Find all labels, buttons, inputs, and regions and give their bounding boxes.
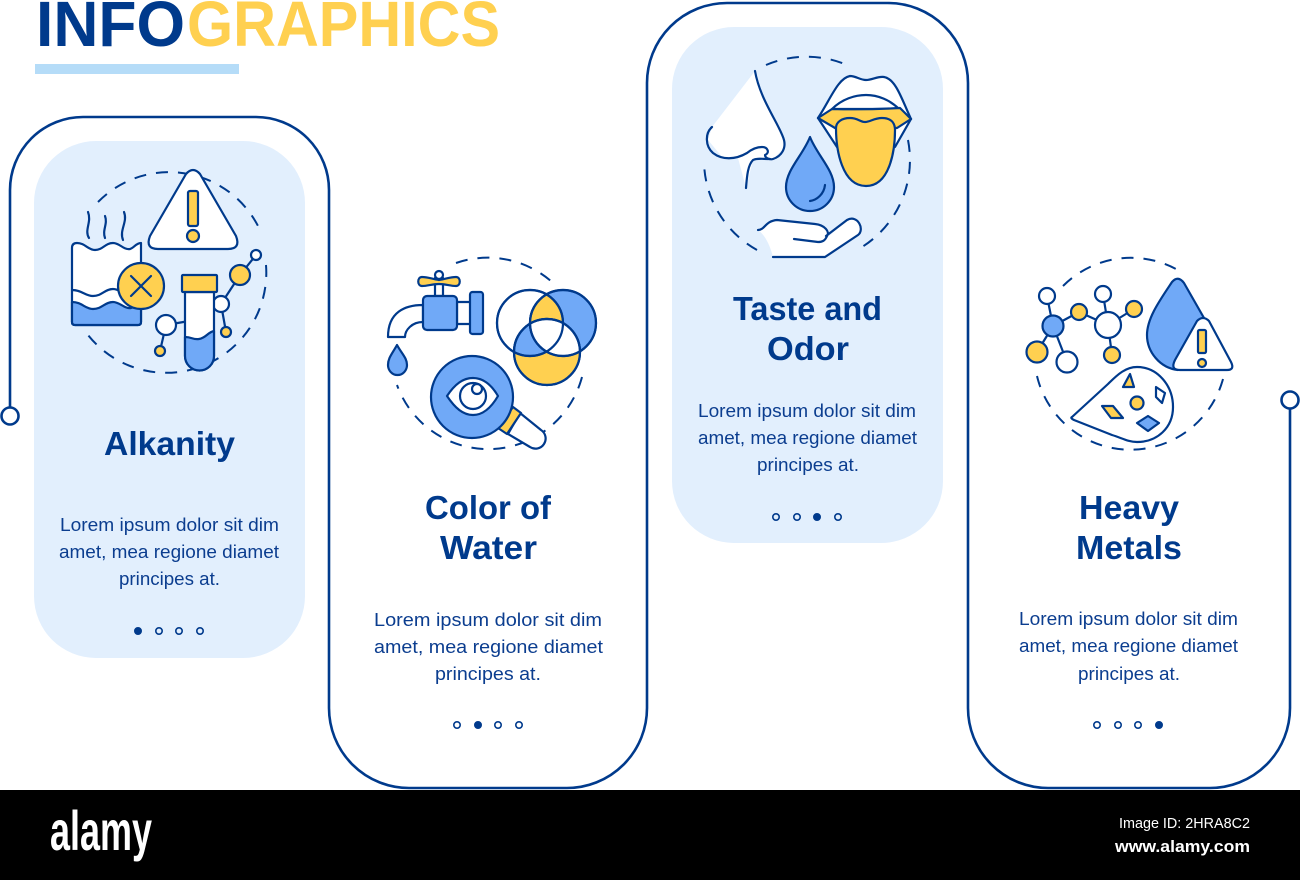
text: Heavy Metals description: Lorem ipsum dolor sit dim: [1019, 609, 1238, 629]
panel: Taste and Odor background: [672, 27, 943, 543]
text: Alkanity description: Lorem ipsum dolor sit dim: [60, 515, 279, 535]
icon: nose, mouth, water drop and hand: [704, 57, 911, 257]
icon: molecules, contaminated drop, warning and rock: [1026, 258, 1232, 450]
text: Heavy Metals description: principes at.: [1078, 664, 1180, 684]
text: Taste and Odor description: [698, 401, 917, 475]
text: Color of Water description: principes at.: [435, 664, 541, 684]
text: Heavy Metals description: [1019, 609, 1238, 684]
heading: Color of Water: [425, 489, 552, 566]
text: Color of Water description: Lorem ipsum dolor sit dim: [374, 610, 602, 630]
heading: Heavy Metals: Metals: [1076, 529, 1182, 566]
pagination dots: step 3: [773, 514, 841, 520]
heading: Alkanity: Alkanity: [104, 425, 236, 462]
icon: faucet, color wheel and magnifier with eye: [388, 258, 596, 449]
footer bar with image credit: [0, 790, 1300, 880]
text: Heavy Metals description: amet, mea regione diamet: [1019, 636, 1238, 656]
footer bar with image credit: Image ID: 2HRA8C2: [1119, 815, 1250, 832]
heading: Heavy Metals: Heavy: [1079, 489, 1180, 526]
pagination dots: step 2: [454, 722, 522, 728]
text: Taste and Odor description: amet, mea regione diamet: [698, 428, 917, 448]
text: Taste and Odor description: principes at.: [757, 455, 859, 475]
text: Color of Water description: amet, mea regione diamet: [374, 637, 603, 657]
footer bar with image credit: www.alamy.com: [1114, 837, 1250, 856]
pagination dots: step 4: [1094, 722, 1162, 728]
text: Color of Water description: [374, 610, 603, 684]
panel: Alkanity background: [34, 141, 305, 658]
text: Alkanity description: [59, 515, 279, 589]
text: Taste and Odor description: Lorem ipsum dolor sit dim: [698, 401, 916, 421]
heading: Color of Water: Water: [440, 529, 537, 566]
icon: alkalinity warning, beaker and test tube: [72, 170, 266, 373]
heading: Taste and Odor: [733, 290, 882, 367]
text: Alkanity description: amet, mea regione diamet: [59, 542, 279, 562]
footer bar with image credit: alamy: [50, 799, 152, 862]
heading: Color of Water: Color of: [425, 489, 552, 526]
header: INFOGRAPHICS title: [35, 0, 500, 74]
heading: Taste and Odor: Odor: [767, 330, 849, 367]
pagination dots: step 1: [135, 628, 203, 634]
text: Alkanity description: principes at.: [119, 569, 220, 589]
heading: Heavy Metals: [1076, 489, 1182, 566]
heading: Taste and Odor: Taste and: [733, 290, 882, 327]
